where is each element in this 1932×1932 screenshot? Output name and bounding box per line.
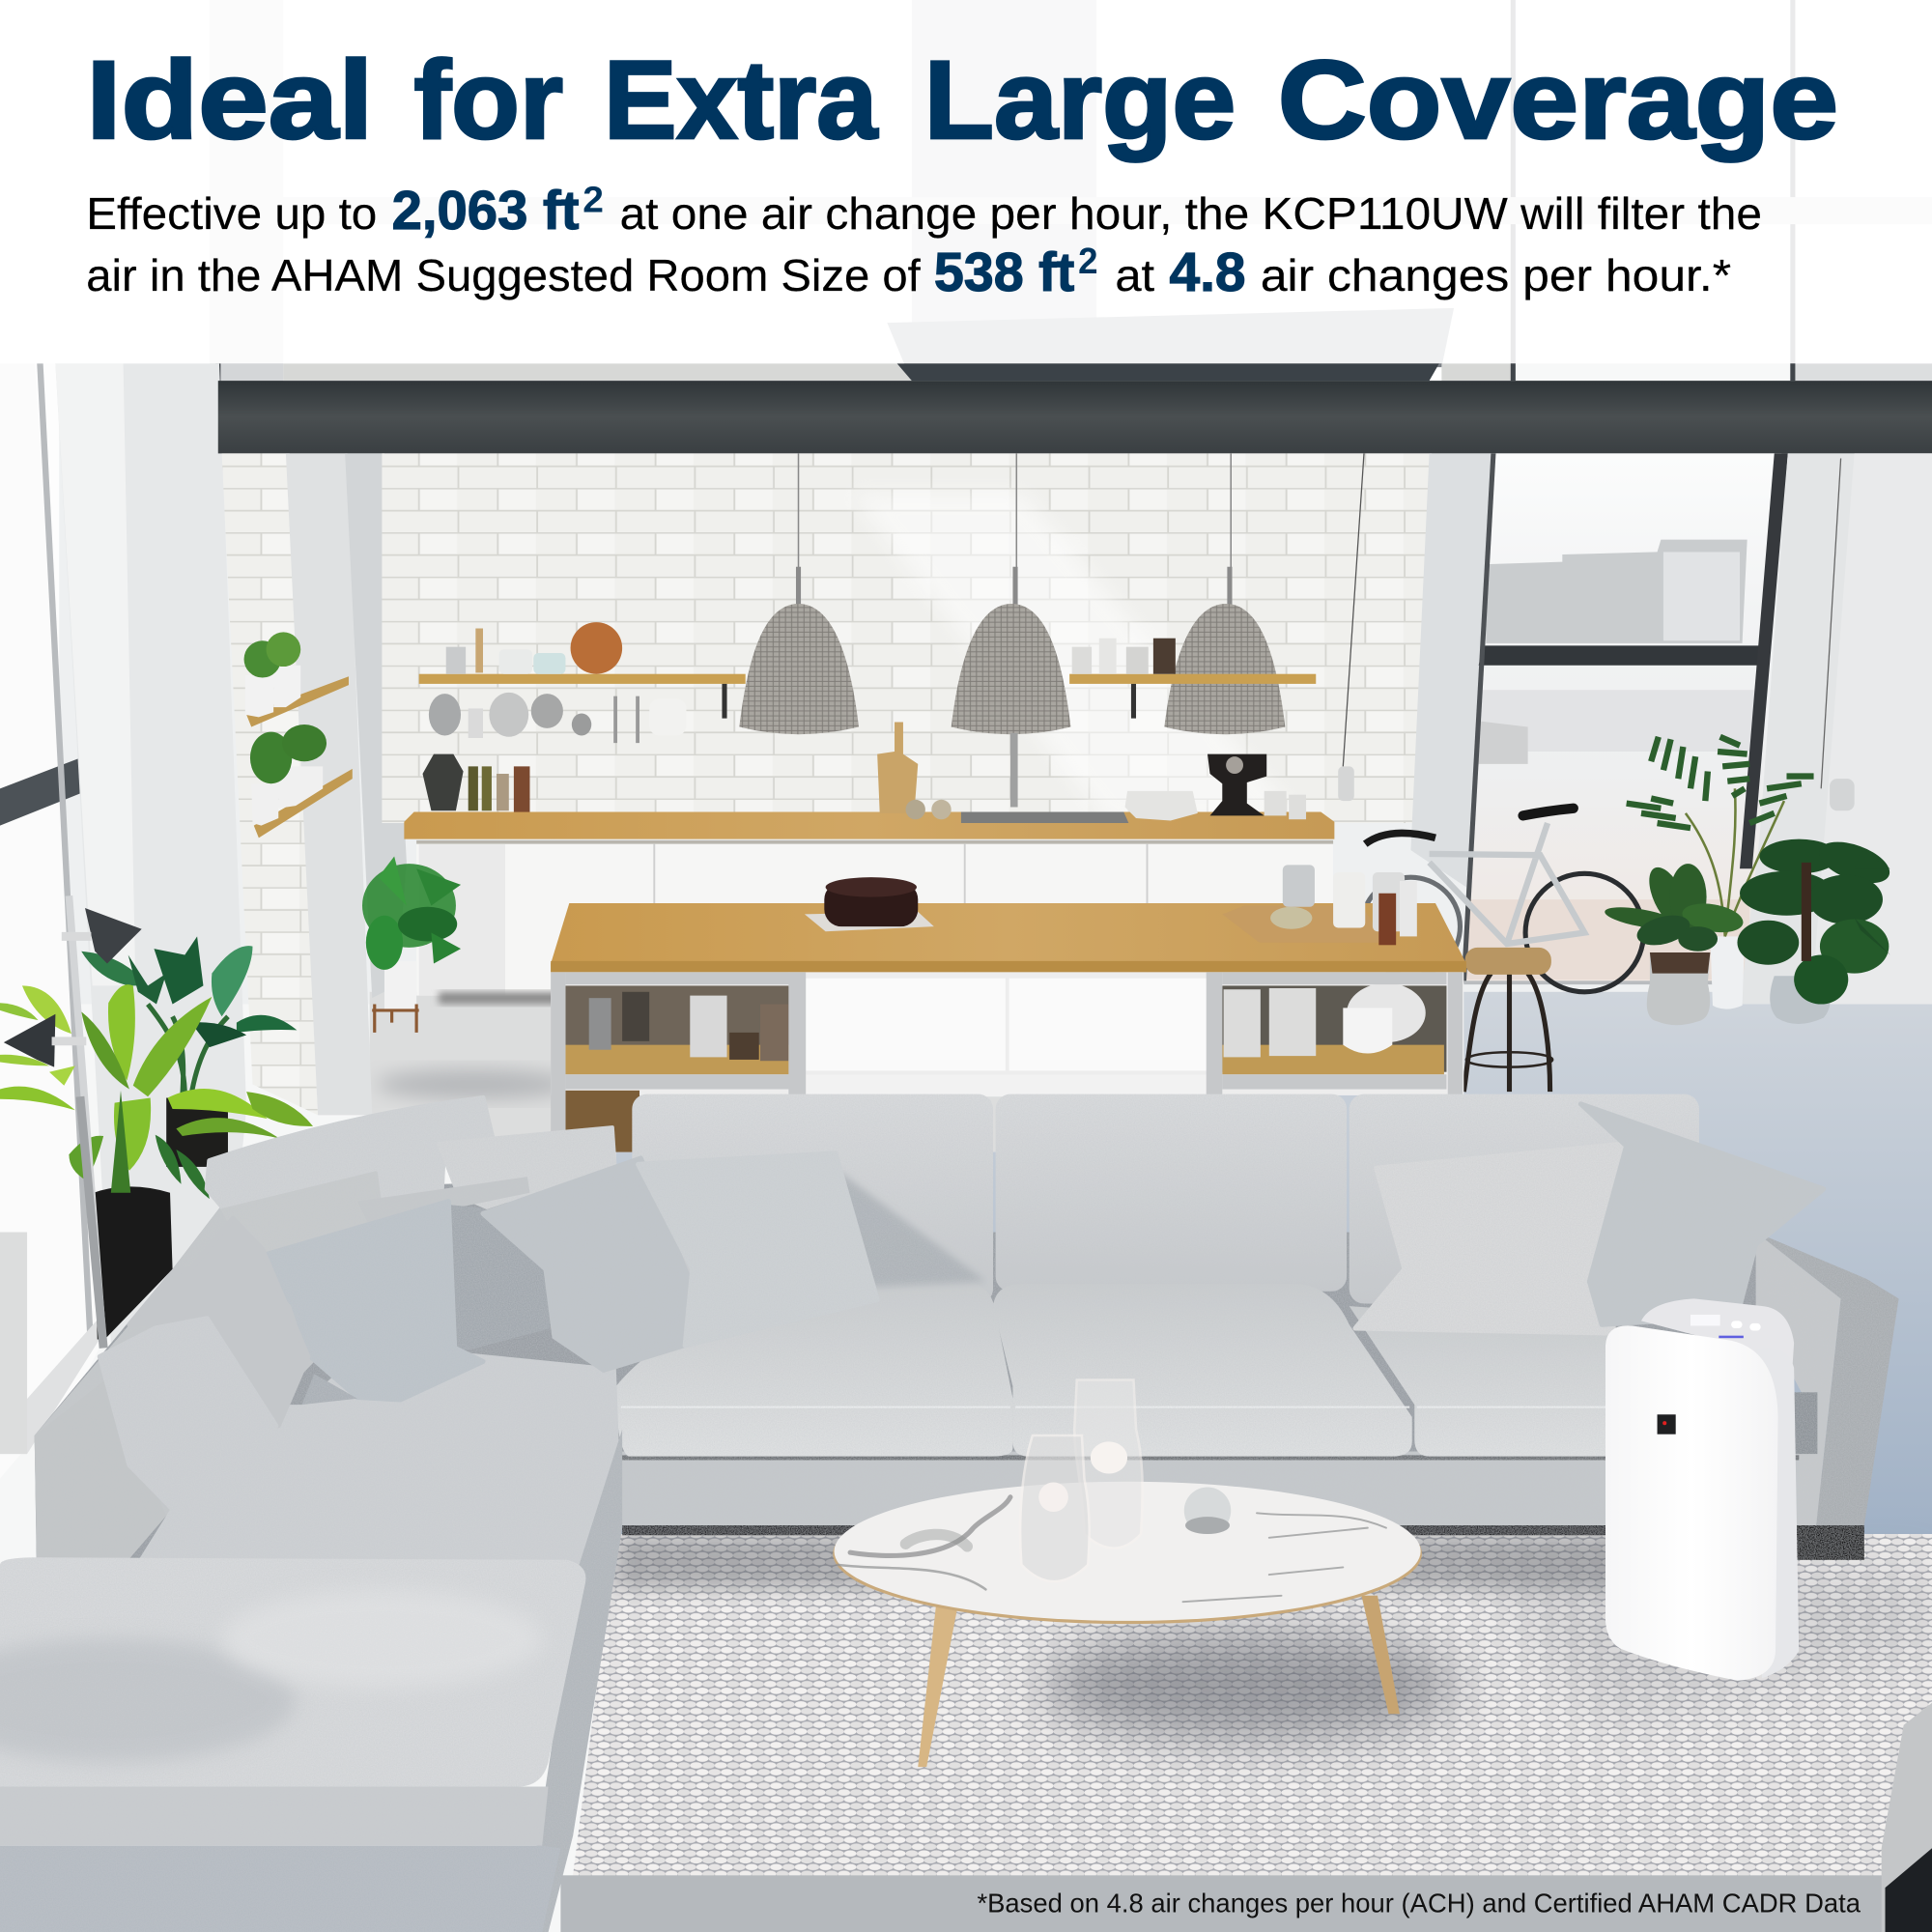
bar stool	[1463, 948, 1552, 1092]
sunlight on wall	[850, 493, 1306, 826]
chocolate cake	[805, 877, 934, 931]
title: Ideal	[86, 39, 373, 162]
marble veins	[838, 1497, 1386, 1602]
title	[86, 39, 1838, 162]
air purifier	[1605, 1298, 1799, 1681]
description line two: at	[1115, 250, 1154, 300]
left back cushion	[207, 1097, 493, 1213]
under sofa strip	[622, 1525, 1615, 1535]
front left pillow	[99, 1319, 276, 1535]
description line one: 2	[582, 179, 604, 220]
wine glasses	[906, 800, 952, 819]
left back sofa body	[35, 1189, 321, 1565]
sofa base	[616, 1452, 1821, 1525]
pendant lamps	[739, 453, 1285, 734]
purifier front	[1605, 1325, 1778, 1681]
left shelf	[565, 985, 790, 1152]
back brick wall	[382, 453, 1432, 823]
right pillow light	[1355, 1144, 1629, 1333]
rug	[573, 1534, 1932, 1875]
table top	[833, 1484, 1422, 1624]
floor lamp	[4, 895, 142, 1348]
kettle and bottles	[423, 754, 529, 812]
monstera leaves	[1737, 834, 1895, 1005]
side pillow	[129, 1218, 308, 1426]
sectional sofa	[0, 1094, 1899, 1932]
center gray pillow	[254, 1202, 483, 1400]
title: Large	[924, 39, 1236, 162]
faucet	[1010, 733, 1018, 807]
right arm outer panel	[1756, 1233, 1899, 1525]
textured pillow	[446, 1207, 549, 1348]
back cushion one	[632, 1094, 993, 1303]
sofa shadow line	[616, 1455, 1817, 1460]
cups	[1264, 791, 1287, 815]
title: Coverage	[1278, 39, 1838, 162]
description line two: 4.8	[1169, 242, 1246, 302]
wall socket	[1338, 766, 1354, 801]
right concrete column	[1740, 453, 1932, 1005]
lamp two	[952, 453, 1070, 734]
seat cushion two	[993, 1284, 1412, 1457]
black plant pot	[94, 1186, 173, 1339]
lamp one	[739, 453, 859, 734]
back pillows small one	[223, 1173, 380, 1254]
chaise seat	[0, 1557, 585, 1786]
plant on stand	[362, 856, 461, 1033]
left window	[0, 363, 101, 1479]
steel ceiling beam	[218, 381, 1932, 453]
small seat shadow	[301, 1374, 357, 1405]
island frame	[551, 972, 1463, 1095]
chaise lower	[0, 1786, 549, 1846]
chaise front	[0, 1846, 560, 1932]
description line one: at one air change per hour, the KCP110UW will filter the	[620, 188, 1762, 239]
left arm	[35, 1380, 166, 1565]
back dark plant	[81, 936, 297, 1167]
front plant pot	[1647, 952, 1710, 1025]
right pillar	[1410, 453, 1493, 887]
title: for	[414, 39, 563, 162]
jars on right shelf	[1072, 639, 1176, 674]
kitchen island	[551, 903, 1466, 1152]
tray with jars and eggs	[1222, 865, 1417, 945]
right arm inner face	[1756, 1233, 1841, 1525]
right window with city view	[1462, 453, 1788, 984]
side brick wall and pillars	[222, 453, 407, 1115]
side wall shelves with plants	[244, 632, 353, 838]
back cushion two	[996, 1094, 1347, 1292]
sofa backing	[35, 1182, 1762, 1589]
counter items	[423, 453, 1364, 820]
right potted plants	[1604, 737, 1895, 1025]
monstera pot	[1770, 976, 1831, 1024]
bottom right ottoman	[1882, 1703, 1932, 1932]
purifier top panel	[1641, 1298, 1794, 1380]
cutting boards	[877, 722, 918, 813]
coffee machine	[1208, 754, 1266, 815]
upper ceiling structure behind header	[0, 0, 1932, 388]
front banana plant	[0, 984, 313, 1199]
left side panel	[524, 1430, 622, 1932]
footnote: *Based on 4.8 air changes per hour (ACH) and Certified AHAM CADR Data	[977, 1889, 1861, 1918]
glass candle	[1184, 1488, 1231, 1534]
left seat section	[135, 1343, 620, 1565]
purifier badge	[1658, 1414, 1676, 1435]
short glass lantern	[1020, 1435, 1090, 1581]
island legs	[551, 972, 1463, 1132]
description line two: 538 ft	[934, 242, 1074, 302]
description line one: 2,063 ft	[392, 180, 579, 241]
marble coffee table	[833, 1380, 1422, 1767]
purifier side	[1756, 1348, 1799, 1678]
table legs	[918, 1596, 1400, 1767]
back pillow thin	[357, 1177, 529, 1226]
title: Extra	[604, 39, 878, 162]
left plants and floor lamp	[0, 895, 313, 1348]
description line two: 2	[1078, 241, 1097, 282]
seat cushion three	[1350, 1306, 1614, 1457]
back cushion three	[1350, 1094, 1699, 1303]
wall shelves with kitchenware	[419, 622, 1316, 743]
bicycle	[1361, 809, 1644, 992]
description line two: air in the AHAM Suggested Room Size of	[86, 250, 921, 300]
polished floor bottom strip	[560, 1875, 1932, 1932]
right shelf	[1222, 983, 1446, 1074]
shadow under left pillows	[838, 1171, 985, 1288]
back pillows small two	[439, 1127, 614, 1208]
white header panel	[0, 0, 1932, 363]
front plant leaves	[1604, 862, 1746, 952]
sofa black foot	[1797, 1525, 1864, 1560]
description line two	[86, 241, 1731, 302]
concrete column left	[55, 363, 246, 1343]
right pillow shaded	[1580, 1104, 1824, 1324]
tall glass lantern	[1074, 1380, 1143, 1548]
description line two: air changes per hour.*	[1261, 250, 1731, 300]
pillow next	[639, 1153, 877, 1346]
seat cushion one	[616, 1284, 1012, 1457]
island center cabinets	[806, 979, 1208, 1096]
large pillow	[483, 1158, 690, 1370]
purifier display	[1690, 1315, 1761, 1338]
description line one	[86, 179, 1762, 241]
plate stack	[1125, 791, 1198, 820]
description line one: Effective up to	[86, 188, 377, 239]
hanging pans	[429, 693, 686, 743]
tall palm plant	[1627, 737, 1814, 1009]
lamp three	[1164, 453, 1285, 734]
cutting board and bowls	[446, 622, 622, 674]
island wooden top	[551, 903, 1466, 972]
kitchen back counter	[404, 812, 1334, 1005]
sunlight and leaf shadows on chaise	[0, 1589, 542, 1762]
fronds	[1627, 737, 1814, 828]
